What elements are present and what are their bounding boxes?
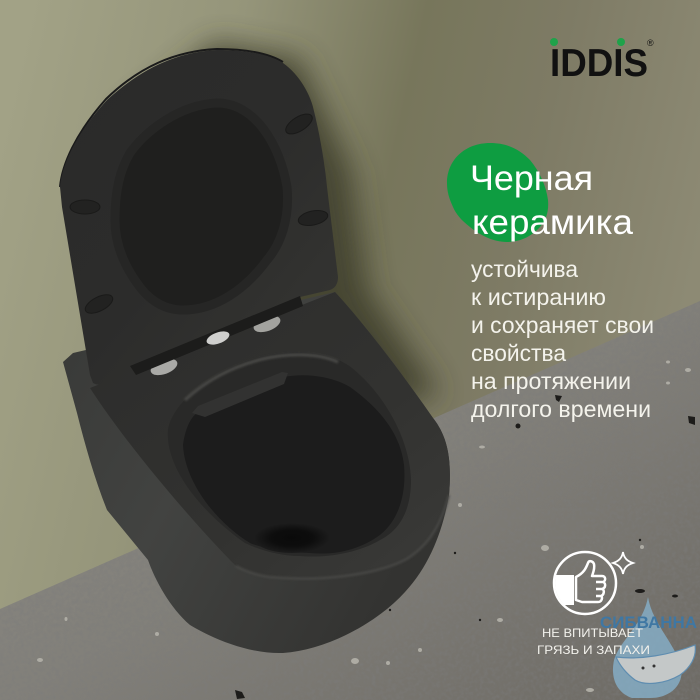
bowl well (183, 375, 404, 554)
heading: Черная (470, 159, 593, 198)
cuff (554, 575, 574, 605)
bowl body (63, 292, 450, 653)
raised toilet seat lid (60, 49, 338, 385)
hinge left (148, 356, 180, 378)
body text: устойчива (471, 256, 578, 282)
hinge bar (130, 296, 303, 375)
lid inner recess with ring (115, 103, 288, 310)
bumper 3 (283, 110, 315, 138)
shadow cast on wall by seat (120, 42, 440, 420)
logo wordmark: IDDIS (550, 42, 648, 85)
chrome hinge fixings (148, 313, 283, 378)
green blob behind heading (447, 143, 548, 242)
bowl opening (168, 352, 411, 557)
bumper 4 (297, 208, 329, 228)
hinge centre (205, 329, 231, 347)
badge caption: НЕ ВПИТЫВАЕТ (542, 626, 644, 640)
bumper 2 (82, 291, 116, 317)
rim inner highlight (185, 355, 338, 400)
lid outer (60, 50, 338, 385)
body text (471, 256, 654, 422)
rim top surface (90, 292, 450, 579)
badge caption: ГРЯЗЬ И ЗАПАХИ (537, 643, 650, 657)
watermark: water drop mascot (613, 597, 695, 698)
logo dot 1 (550, 38, 558, 46)
badge caption (537, 626, 650, 657)
body text: на протяжении (471, 368, 631, 394)
flush shelf under rim (192, 372, 288, 417)
watermark text: СИБВАННА (600, 613, 697, 632)
toilet bowl (63, 292, 450, 653)
drain shadow (254, 523, 330, 553)
body text: свойства (471, 340, 566, 366)
rim edge highlight (236, 495, 449, 579)
concrete floor (0, 301, 700, 700)
hinge right (251, 313, 283, 335)
terrazzo specks (37, 360, 695, 699)
heading (470, 159, 634, 242)
tub (616, 645, 695, 683)
logo dot 2 (617, 38, 625, 46)
body text: к истиранию (471, 284, 606, 310)
logo (550, 38, 654, 85)
heading: керамика (472, 203, 634, 242)
registered mark: ® (647, 38, 654, 48)
lid back edge (60, 49, 283, 187)
body text: долгого времени (471, 396, 651, 422)
body text: и сохраняет свои (471, 312, 654, 338)
thumb (576, 561, 605, 602)
icon: sparkle (613, 552, 633, 574)
bumper 1 (70, 200, 100, 214)
icon: thumbs up in circle (554, 552, 616, 614)
